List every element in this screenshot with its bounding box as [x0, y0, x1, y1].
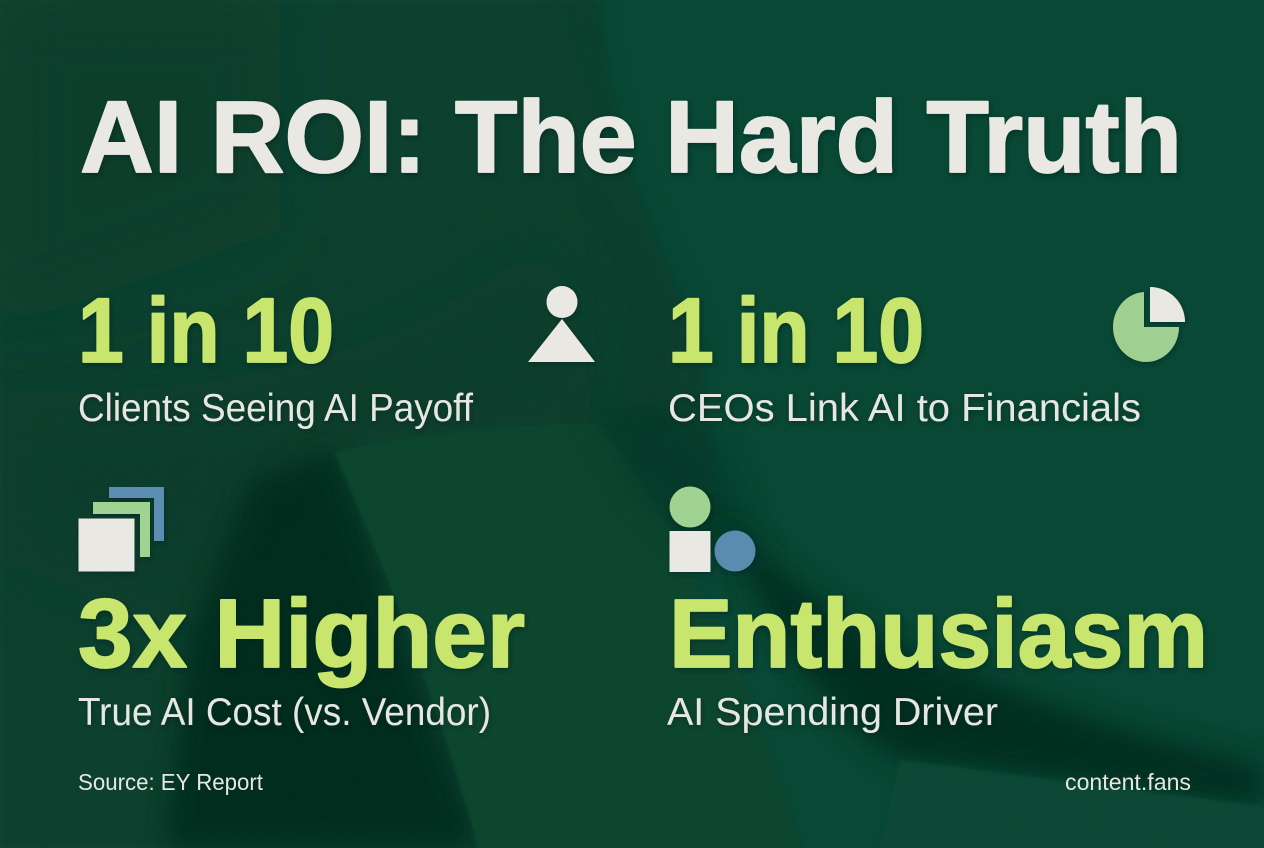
source: Source: EY Report: [78, 769, 264, 795]
panel: CEOs link AI to financials: [668, 280, 1185, 430]
icon: person: [528, 286, 595, 362]
panel: clients seeing AI payoff: [78, 280, 595, 430]
brand: content.fans: [1065, 769, 1191, 795]
stat: 1 in 10 CEOs: 1 in 10: [668, 280, 924, 382]
stat: enthusiasm: Enthusiasm: [669, 579, 1208, 688]
stat: 1 in 10 clients: 1 in 10: [78, 280, 334, 382]
icon: stacked squares: [78, 487, 164, 572]
icon: circles and square: [670, 486, 756, 572]
title: AI ROI: The Hard Truth: [80, 80, 1182, 194]
label: CEOs link AI to financials: CEOs Link AI to Financials: [668, 387, 1141, 430]
icon: pie chart: [1113, 287, 1185, 362]
label: clients seeing AI payoff: Clients Seeing AI Payoff: [78, 387, 473, 430]
panel: AI spending driver: [667, 486, 1208, 734]
label: true AI cost: True AI Cost (vs. Vendor): [78, 691, 491, 734]
stat: 3x higher: 3x Higher: [78, 579, 525, 688]
label: AI spending driver: AI Spending Driver: [667, 691, 998, 734]
panel: true AI cost: [78, 487, 525, 734]
